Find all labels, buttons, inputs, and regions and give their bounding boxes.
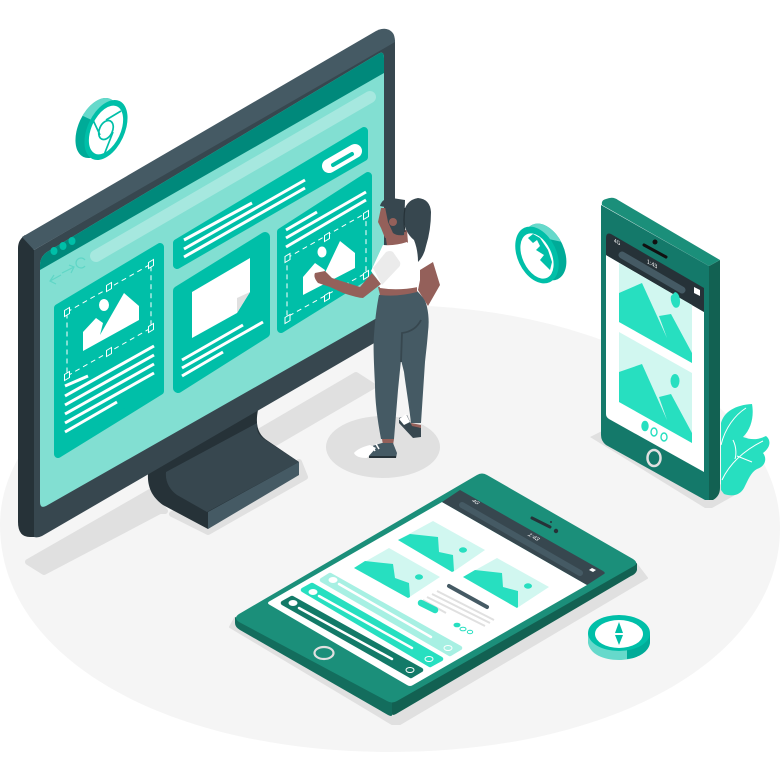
- status bar: [606, 234, 704, 312]
- card: image with text: [58, 247, 160, 454]
- shirt sleeve: [371, 245, 383, 284]
- list row bright: [303, 585, 441, 665]
- phone top edge: [602, 198, 720, 266]
- text lines: [286, 192, 366, 247]
- tablet screen: [268, 502, 587, 686]
- monitor left side: [18, 235, 34, 537]
- list row pale: [322, 575, 460, 654]
- tablet face: [236, 474, 636, 702]
- selection frame: [67, 264, 151, 376]
- screen: [606, 255, 704, 472]
- stand neck and back edge: [148, 410, 299, 529]
- tablet shadow: [230, 565, 647, 724]
- phone: [590, 198, 737, 508]
- ear: [389, 218, 397, 226]
- left shoe: [369, 443, 397, 458]
- coin face: [76, 93, 136, 167]
- status text: 4G: [469, 499, 481, 506]
- address bar: [96, 97, 370, 256]
- floor ellipse: [0, 305, 780, 752]
- monitor stand: [148, 410, 299, 529]
- trouser crease: [401, 320, 421, 362]
- small button: [421, 603, 435, 610]
- phone front: [601, 205, 709, 500]
- back sleeve: [420, 253, 433, 270]
- home button: [648, 450, 660, 466]
- clock text: 1:43: [647, 259, 658, 271]
- list row dark: [283, 598, 421, 676]
- card: document: [178, 237, 265, 388]
- coin edge: [515, 217, 575, 287]
- coin face: [507, 220, 567, 290]
- firefox logo: [528, 234, 552, 270]
- pager dots: [642, 422, 667, 441]
- sleeve highlight: [373, 251, 400, 285]
- navigation icons: [50, 258, 85, 284]
- picture glyph: [303, 241, 355, 295]
- image A: [398, 521, 485, 572]
- status text: 4G: [614, 238, 620, 248]
- paper curl: [237, 292, 250, 313]
- speaker and camera: [644, 240, 666, 257]
- plant leaves: [721, 404, 769, 495]
- chrome icon: [75, 98, 128, 160]
- lower image: [619, 332, 692, 443]
- text lines: [65, 346, 154, 432]
- neck: [385, 230, 408, 246]
- battery icon: [694, 287, 700, 296]
- head hair: [380, 198, 405, 235]
- face: [378, 208, 395, 238]
- woman: [314, 198, 440, 458]
- card: heading with button: [177, 131, 364, 265]
- tablet: [230, 474, 647, 724]
- compass: [588, 615, 650, 660]
- stand front face: [208, 462, 299, 529]
- tablet left edge: [235, 617, 392, 716]
- ponytail: [403, 198, 431, 262]
- compass face: [588, 615, 650, 651]
- upper image: [619, 263, 692, 363]
- pill button: [329, 151, 355, 166]
- heading lines: [184, 180, 305, 257]
- image B: [354, 548, 440, 598]
- home button: [314, 647, 334, 659]
- ankles: [382, 423, 421, 445]
- clock text: 1:43: [525, 533, 541, 542]
- stand top surface: [166, 423, 299, 512]
- browser header: [40, 53, 384, 270]
- tablet right edge: [392, 563, 637, 715]
- coin edge: [67, 91, 127, 165]
- plant: [721, 404, 769, 495]
- shirt: [373, 242, 420, 289]
- selection handles: [64, 260, 154, 380]
- trousers: [374, 291, 429, 439]
- pager dots: [454, 623, 473, 634]
- ponytail shadow: [404, 208, 405, 232]
- address bar: [462, 505, 580, 573]
- leaf veins: [721, 408, 763, 480]
- monitor front bezel: [34, 40, 395, 537]
- picture glyph: [83, 293, 139, 351]
- monitor: [18, 29, 395, 537]
- back arm: [418, 262, 440, 306]
- speaker and camera: [532, 518, 558, 533]
- image C: [463, 558, 549, 608]
- person floor shadow: [326, 416, 440, 478]
- card: image being edited: [281, 176, 368, 329]
- compass side: [588, 633, 650, 660]
- waist: [378, 287, 417, 296]
- text block: [423, 586, 494, 626]
- monitor floor shadow: [28, 375, 373, 572]
- battery icon: [589, 568, 596, 572]
- selection frame: [287, 213, 366, 317]
- chrome logo: [93, 111, 121, 155]
- screen: [40, 53, 384, 507]
- status bar: [442, 490, 605, 585]
- window dots: [50, 237, 76, 255]
- paper sheet: [192, 258, 250, 338]
- right shoe: [399, 415, 421, 438]
- monitor top edge: [22, 29, 395, 250]
- address pill: [622, 255, 682, 290]
- caption lines: [182, 322, 263, 376]
- firefox icon: [515, 224, 566, 284]
- phone shadow: [590, 431, 737, 508]
- phone right side: [709, 260, 720, 500]
- selection handles: [285, 210, 368, 324]
- compass needle: [615, 622, 623, 645]
- reaching arm and hand: [314, 271, 381, 298]
